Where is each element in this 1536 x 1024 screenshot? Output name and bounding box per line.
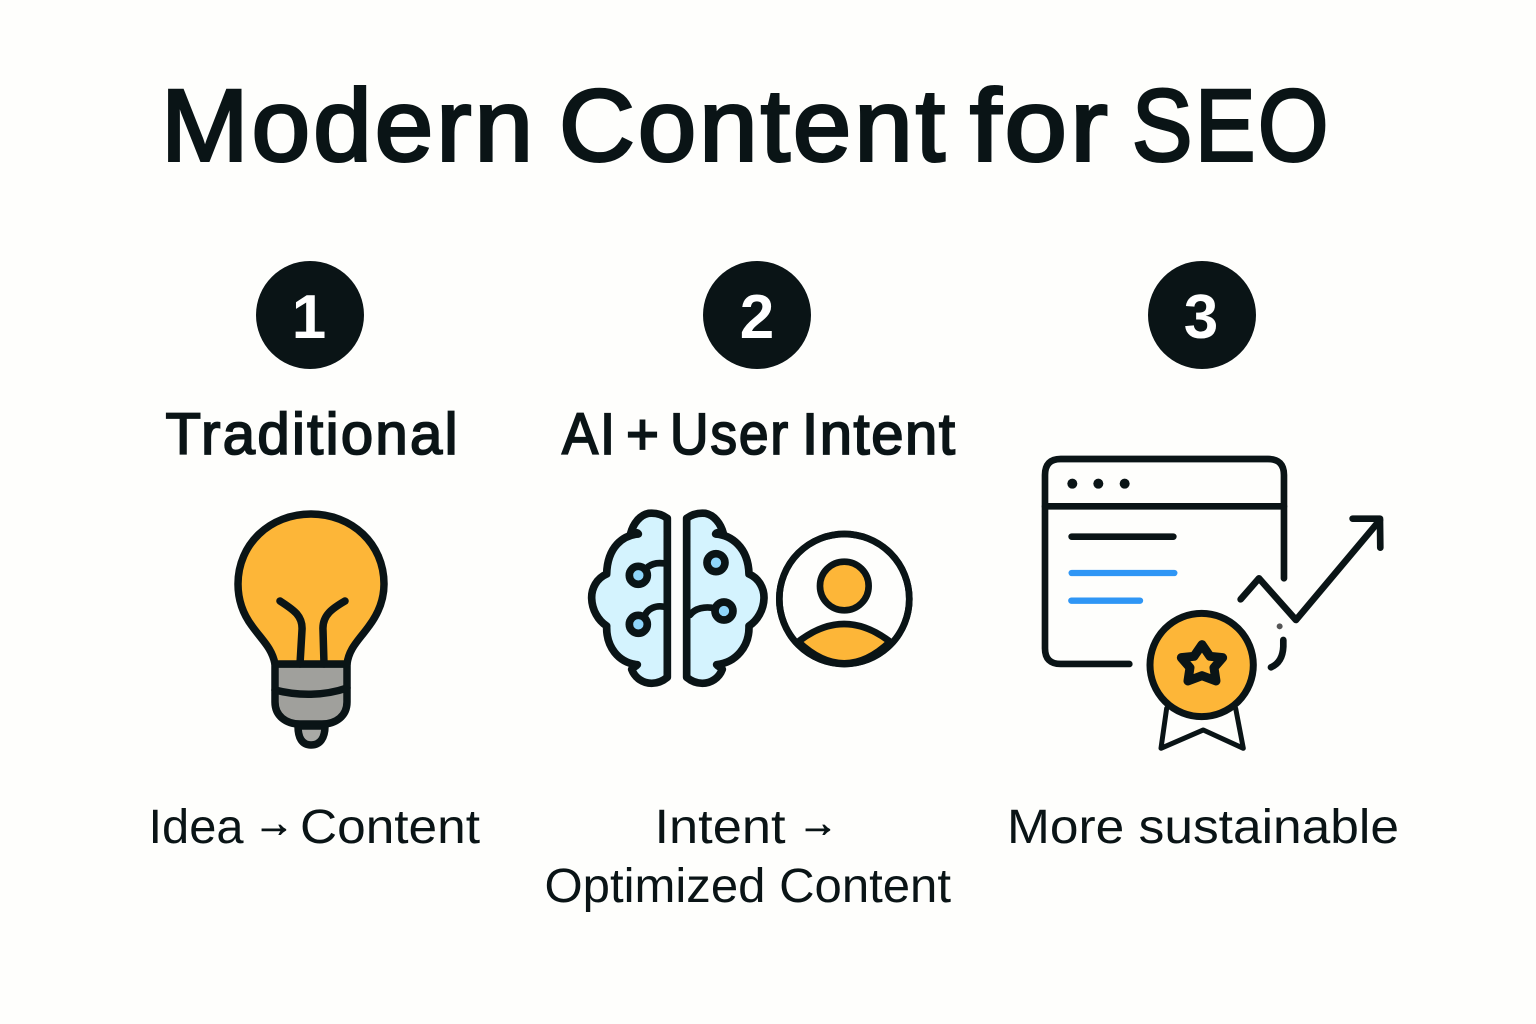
caption: intent to optimized content: →: [798, 802, 838, 846]
caption: idea to content: →: [254, 802, 294, 846]
heading: ai + user intent: [562, 402, 955, 467]
heading: traditional: Traditional: [166, 402, 458, 467]
growth arrow: [1241, 519, 1380, 620]
badge: number 2: 2: [740, 283, 774, 352]
badge: number 3: [1148, 261, 1256, 369]
heading: ai + user intent: AI: [562, 402, 617, 467]
badge: number 1: 1: [292, 283, 326, 352]
title: SEO: [1132, 68, 1331, 182]
icon: browser window with growth arrow and medal: [1045, 459, 1380, 748]
badge: number 3: 3: [1184, 283, 1218, 352]
title: for: [970, 68, 1111, 182]
icon: light bulb: [238, 514, 384, 745]
caption: intent to optimized content: Intent: [654, 801, 786, 854]
caption: idea to content: Content: [300, 801, 480, 854]
caption: intent to optimized content: Optimized Content: [544, 860, 951, 913]
title: [161, 68, 1331, 182]
medal: [1150, 613, 1253, 748]
browser window: [1045, 459, 1284, 664]
window corner fragment: [1271, 623, 1283, 667]
heading: ai + user intent: Intent: [802, 402, 955, 467]
caption: idea to content: Idea: [148, 801, 244, 854]
icon: brain: [592, 513, 764, 683]
panel: more sustainable: [1007, 261, 1399, 854]
caption: more sustainable: More sustainable: [1007, 801, 1399, 854]
icon: user: [779, 534, 909, 664]
title: Modern: [161, 68, 536, 182]
heading: ai + user intent: User: [670, 402, 790, 467]
badge: number 2: [703, 261, 811, 369]
title: Content: [559, 68, 948, 182]
panel: traditional: [148, 261, 480, 854]
caption: intent to optimized content: [544, 801, 951, 913]
badge: number 1: [256, 261, 364, 369]
panel: ai + user intent: [544, 261, 955, 913]
heading: ai + user intent: +: [626, 402, 659, 467]
caption: idea to content: [148, 801, 480, 854]
